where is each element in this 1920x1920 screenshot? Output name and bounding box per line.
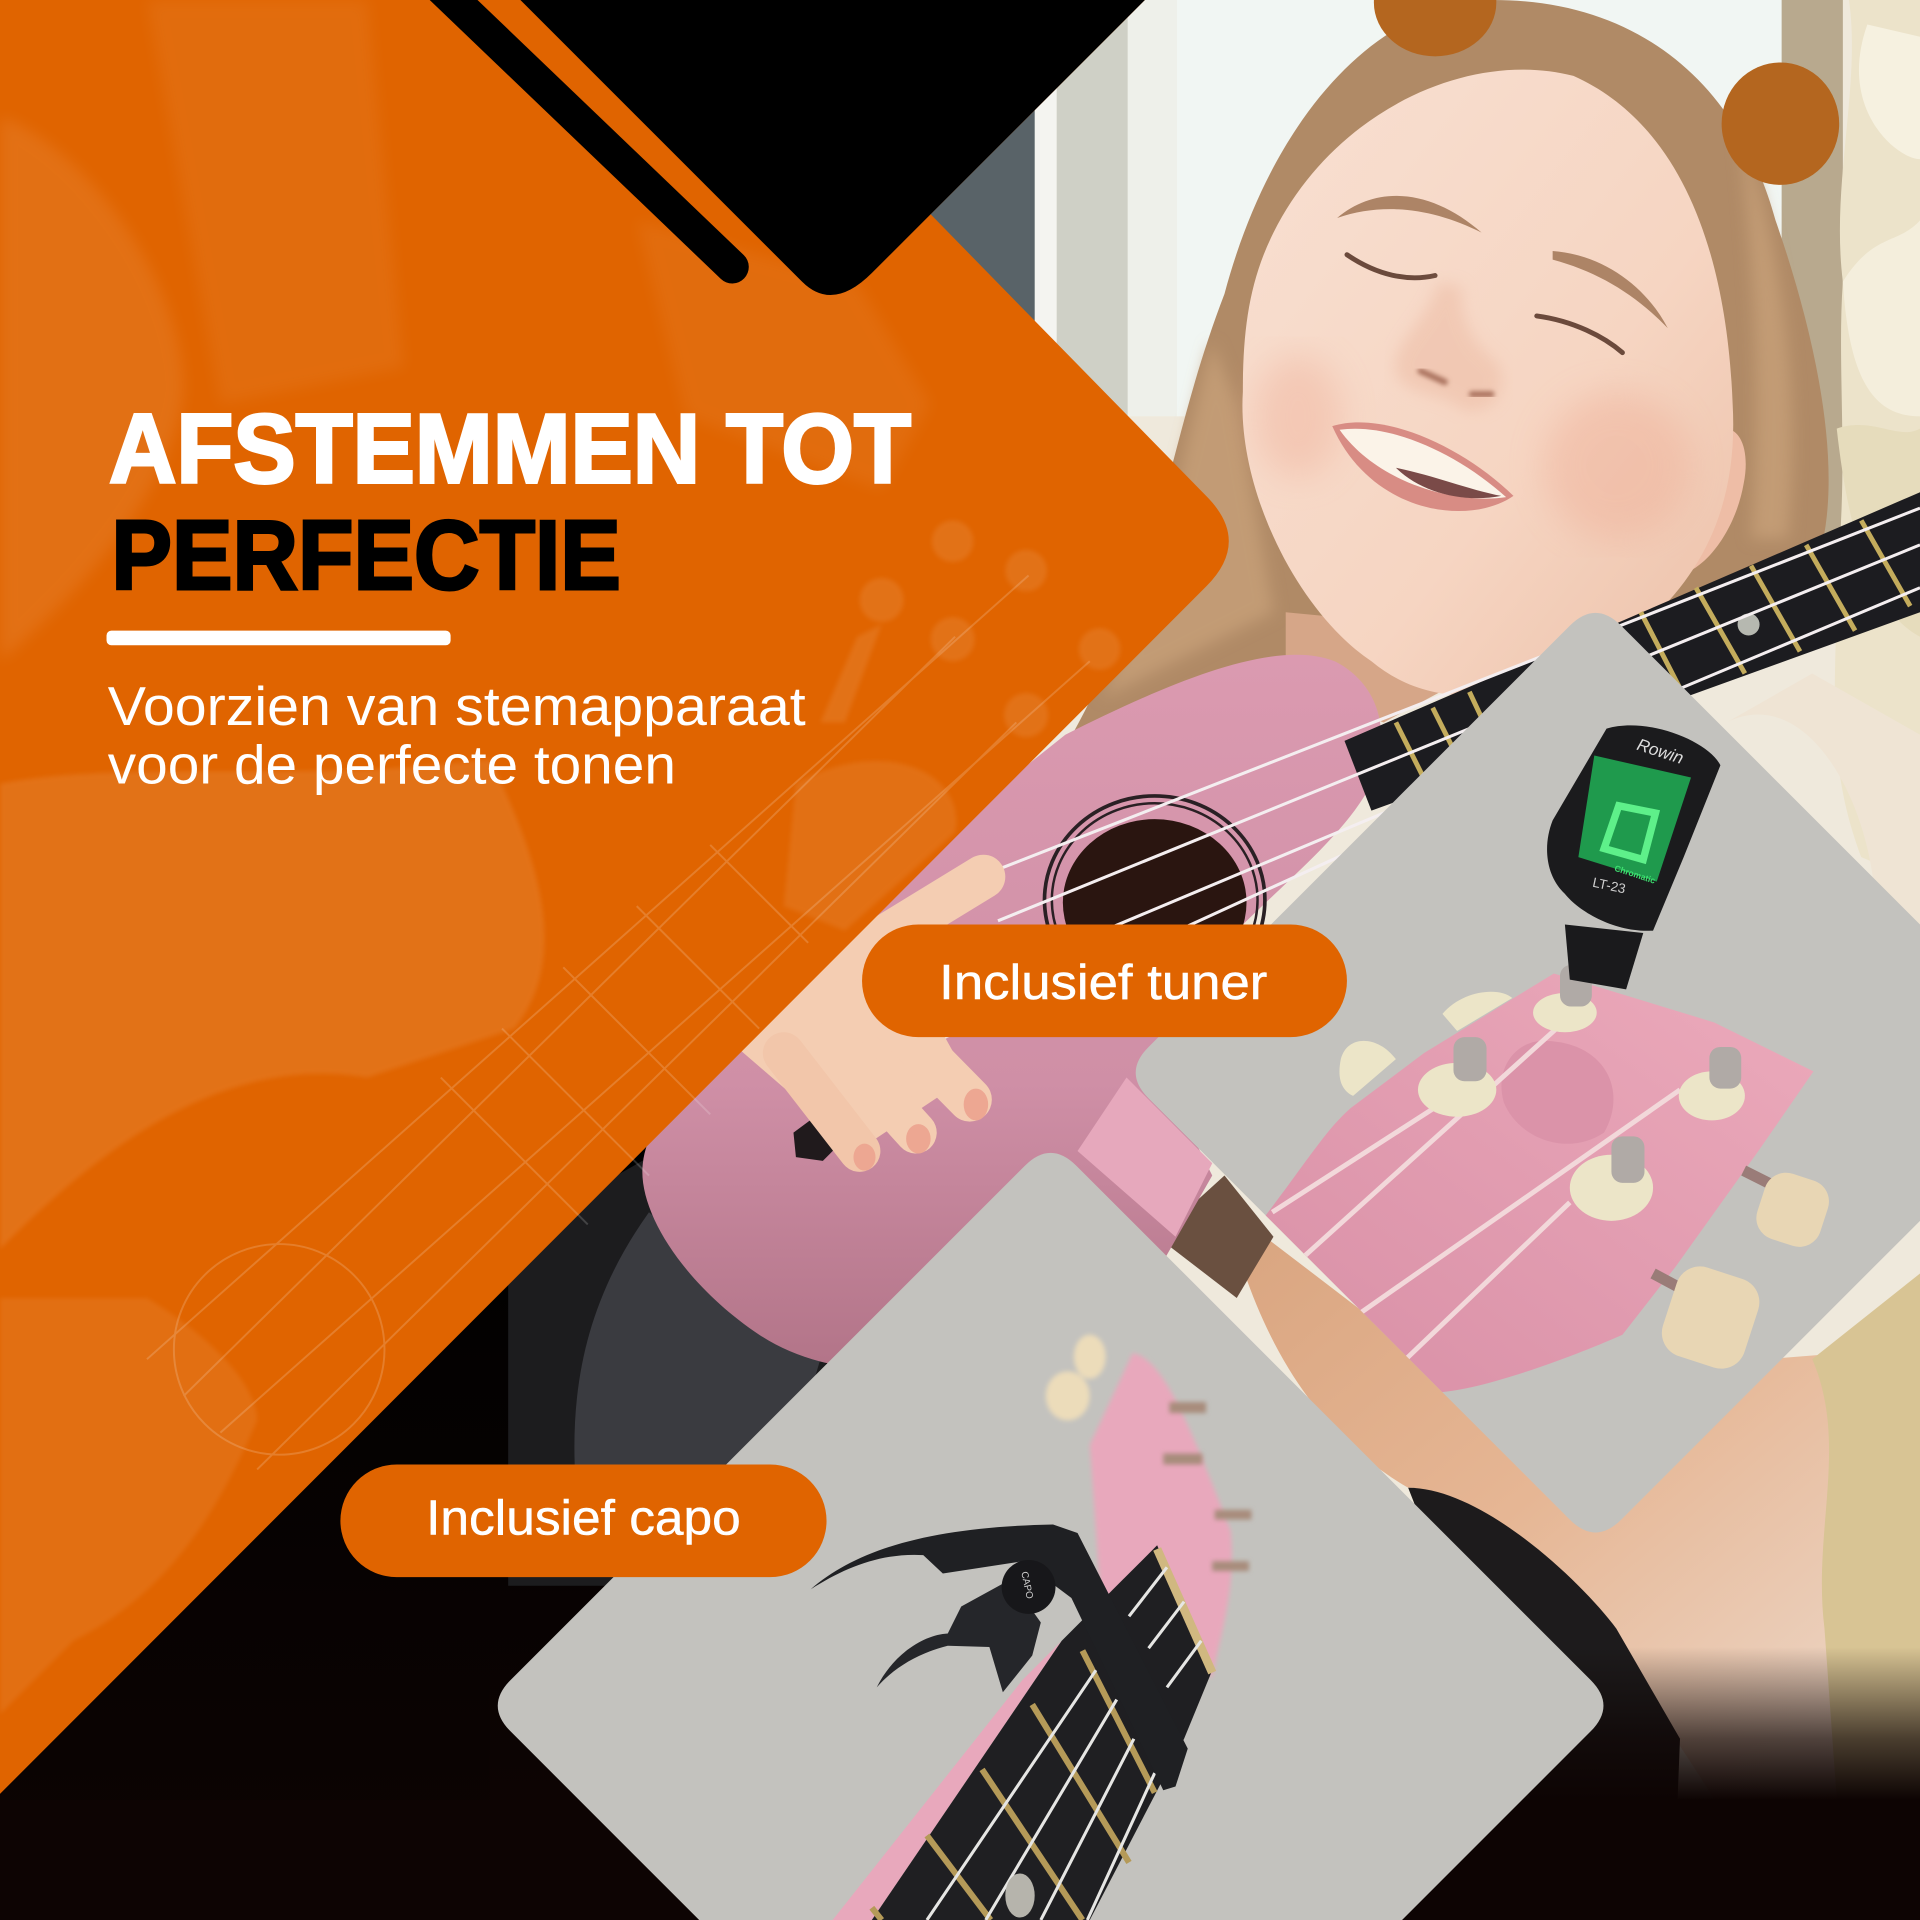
blurred cream pegs bbox=[1046, 1335, 1106, 1420]
black sleeve lower right bbox=[1408, 1488, 1680, 1800]
title line 2: PERFECTIE bbox=[111, 500, 621, 610]
window and wall background bbox=[857, 0, 1920, 1800]
bottom black band bbox=[0, 1800, 1920, 1920]
tuning post metal bbox=[1453, 965, 1741, 1183]
panel: capo card bbox=[498, 1153, 1603, 1920]
hair lower brown between cards bbox=[1157, 1176, 1273, 1298]
capo pivot bbox=[1002, 1560, 1056, 1614]
curtain lower right bbox=[1812, 1273, 1920, 1800]
black triangle at top bbox=[520, 0, 1145, 295]
tuner brand: Rowin bbox=[1635, 734, 1686, 768]
pill label: capo: Inclusief capo bbox=[426, 1491, 741, 1545]
photo: smiling girl with pink ukulele bbox=[508, 0, 1920, 1800]
subtitle line 2: voor de perfecte tonen bbox=[108, 734, 676, 796]
tuner screen bbox=[1578, 756, 1691, 882]
clothing dark left bbox=[508, 1157, 833, 1586]
ghost hands bbox=[0, 1298, 257, 1714]
closed eye left bbox=[1347, 255, 1435, 278]
earring bbox=[1644, 553, 1662, 588]
neck bbox=[1286, 612, 1543, 722]
capo lower lever bbox=[877, 1580, 1041, 1692]
mouth bbox=[1332, 422, 1513, 511]
arm bbox=[1237, 1224, 1920, 1800]
pom-pom right bbox=[1722, 62, 1839, 185]
fret marker bbox=[1005, 1873, 1035, 1918]
ghost playing hand bbox=[784, 761, 956, 931]
ghost lace blouse bbox=[0, 759, 545, 1249]
sound hole bbox=[1044, 796, 1265, 1004]
strap button bbox=[793, 1108, 845, 1161]
ukulele body bbox=[642, 655, 1381, 1370]
panel: orange diagonal shape bbox=[0, 0, 1229, 1794]
headstock strings bbox=[1272, 1007, 1680, 1362]
subtitle line 1: Voorzien van stemapparaat bbox=[108, 675, 806, 737]
pink headstock bbox=[1249, 973, 1813, 1392]
nose bbox=[1395, 282, 1502, 411]
fretboard bbox=[1344, 492, 1920, 811]
tuning post discs bbox=[1418, 993, 1745, 1221]
pill label: tuner: Inclusief tuner bbox=[939, 956, 1267, 1010]
frets bbox=[1396, 520, 1910, 784]
panel: tuner card bbox=[1136, 613, 1920, 1532]
tuner chromatic label: Chromatic bbox=[1613, 863, 1657, 886]
hair bbox=[1065, 0, 1829, 747]
fretboard strings bbox=[927, 1567, 1201, 1920]
ghost face bbox=[0, 116, 184, 661]
pink neck edge bbox=[833, 1641, 1062, 1920]
title line 1: AFSTEMMEN TOT bbox=[109, 393, 911, 503]
capo label: CAPO bbox=[1018, 1571, 1035, 1600]
blurred tuning posts bbox=[1163, 1402, 1251, 1571]
peg shafts bbox=[1653, 1171, 1773, 1292]
headstock shadow bbox=[1501, 1041, 1613, 1144]
face bbox=[1242, 70, 1733, 695]
hand bbox=[741, 877, 983, 1151]
fret marker bbox=[1738, 613, 1760, 636]
eyebrow left bbox=[1337, 196, 1482, 233]
ghost shelf shapes bbox=[147, 0, 931, 490]
ghost photo inside orange panel bbox=[0, 0, 1120, 1714]
pill label: tuner bbox=[862, 924, 1347, 1037]
divider bar bbox=[107, 631, 451, 645]
tuner body bbox=[1547, 725, 1720, 931]
front cream pegs bbox=[1662, 1172, 1829, 1369]
fingernails bbox=[853, 1089, 988, 1171]
nut bbox=[1157, 1549, 1212, 1673]
blurred pink headstock bbox=[1090, 1353, 1232, 1678]
fretboard bbox=[872, 1545, 1212, 1920]
eyebrow right bbox=[1553, 251, 1668, 328]
ghost strings, frets and sound hole bbox=[147, 576, 1090, 1469]
frets bbox=[872, 1651, 1155, 1920]
hair highlights bbox=[1102, 122, 1792, 698]
tuner model: LT-23 bbox=[1591, 875, 1627, 896]
tuner display digit bbox=[1604, 806, 1656, 860]
bottom fade to black bbox=[490, 1647, 1920, 1800]
cheek blush bbox=[1254, 355, 1690, 539]
strings bbox=[857, 508, 1920, 1078]
jeans grey bbox=[574, 1212, 820, 1482]
ghost tuning pegs bbox=[820, 520, 1120, 737]
pom-pom top bbox=[1374, 0, 1496, 56]
nostrils bbox=[1420, 371, 1491, 394]
tuner clip bbox=[1565, 924, 1643, 989]
closed eye right bbox=[1537, 316, 1622, 353]
ukulele side lighter strip bbox=[1078, 1078, 1212, 1237]
capo body bbox=[811, 1524, 1188, 1790]
pill label: capo bbox=[340, 1464, 827, 1577]
back cream pegs bbox=[1339, 992, 1512, 1096]
curtain bbox=[1727, 0, 1920, 955]
ear bbox=[1678, 429, 1746, 576]
black diagonal stripe bbox=[441, 0, 732, 267]
